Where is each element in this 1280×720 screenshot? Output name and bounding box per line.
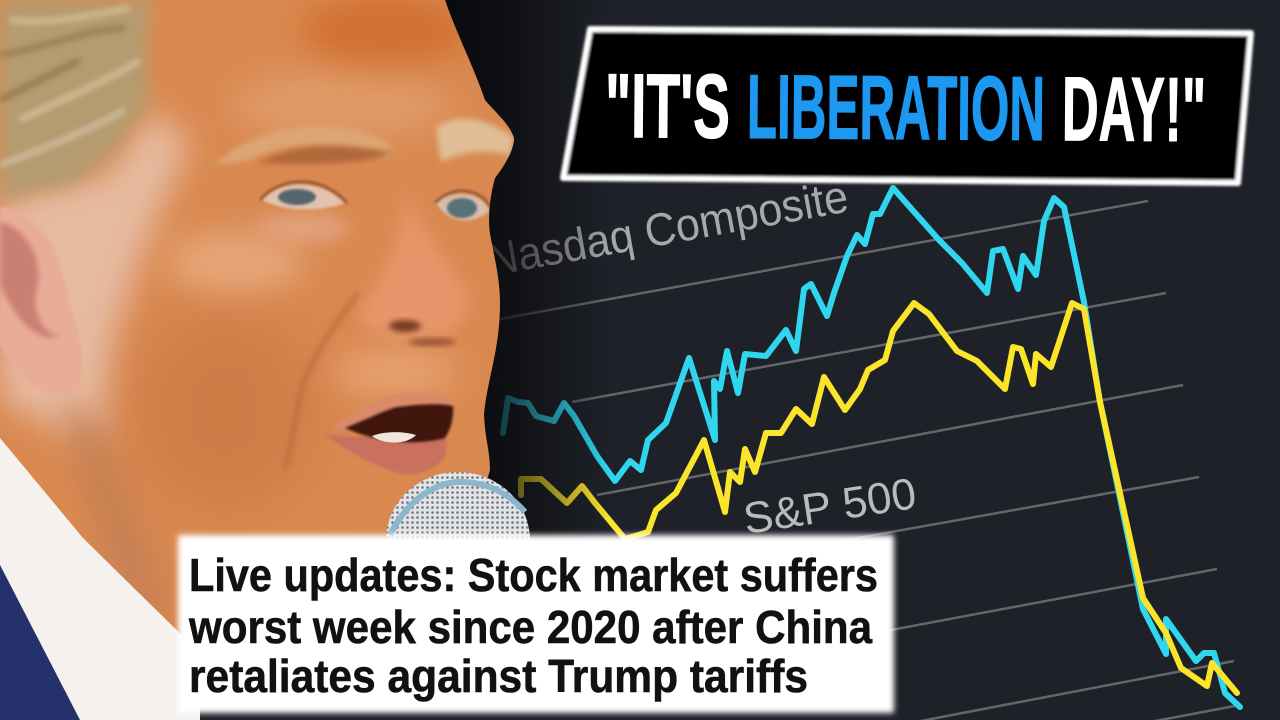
- title text: [605, 56, 1206, 161]
- upper lip: [331, 393, 454, 432]
- headline card: [178, 535, 894, 713]
- title banner: [563, 29, 1251, 183]
- pale temple and neck zone: [0, 110, 190, 450]
- head: [0, 0, 530, 660]
- suit jacket: [0, 565, 80, 720]
- neck shadow: [60, 400, 180, 640]
- under-eye highlight: [165, 232, 305, 292]
- chart: Nasdaq Composite and S&P 500 falling: [440, 0, 1240, 720]
- ear: [0, 207, 83, 396]
- nostril: [389, 320, 421, 332]
- hair streaks: [0, 8, 140, 165]
- left eye: [262, 185, 345, 209]
- nasolabial crease: [285, 293, 359, 470]
- line: S&amp;P 500 (yellow): [521, 303, 1237, 693]
- mouth opening: [345, 404, 453, 442]
- left brow shadow: [258, 146, 393, 164]
- left eyelid: [260, 182, 347, 203]
- card background: [178, 535, 894, 713]
- microphone ring: [390, 482, 525, 535]
- headline text: Live updates: Stock market suffers: [189, 549, 878, 601]
- microphone: [386, 472, 530, 608]
- dark vignette beside the photo: [440, 0, 610, 560]
- inner ear: [0, 222, 60, 338]
- headline text: worst week since 2020 after China: [188, 601, 872, 653]
- left eyebrow: [214, 126, 391, 165]
- banner box: [563, 29, 1251, 183]
- headline text: retaliates against Trump tariffs: [189, 650, 808, 702]
- headline text: [188, 549, 878, 702]
- upper lip highlight: [333, 350, 457, 394]
- left eye bag: [257, 213, 349, 243]
- nose underside: [408, 338, 456, 346]
- white shirt collar: [0, 436, 200, 720]
- right eyebrow: [436, 119, 514, 162]
- label: S&amp;P 500: S&P 500: [740, 469, 920, 544]
- label: Nasdaq Composite: Nasdaq Composite: [483, 170, 852, 286]
- cheek: [108, 328, 296, 492]
- right eye: [436, 194, 490, 220]
- nose: [359, 190, 469, 338]
- photo: man speaking into a microphone: [0, 0, 530, 720]
- line: Nasdaq (cyan): [503, 188, 1240, 707]
- right eyelid: [435, 191, 491, 208]
- skin base: [0, 0, 530, 660]
- forehead orange: [300, 0, 470, 64]
- hair: [0, 0, 155, 200]
- microphone grille: [386, 472, 530, 608]
- title text: "IT'S: [605, 56, 730, 158]
- forehead bright: [230, 70, 450, 140]
- lower lip: [326, 434, 447, 475]
- teeth: [372, 432, 416, 443]
